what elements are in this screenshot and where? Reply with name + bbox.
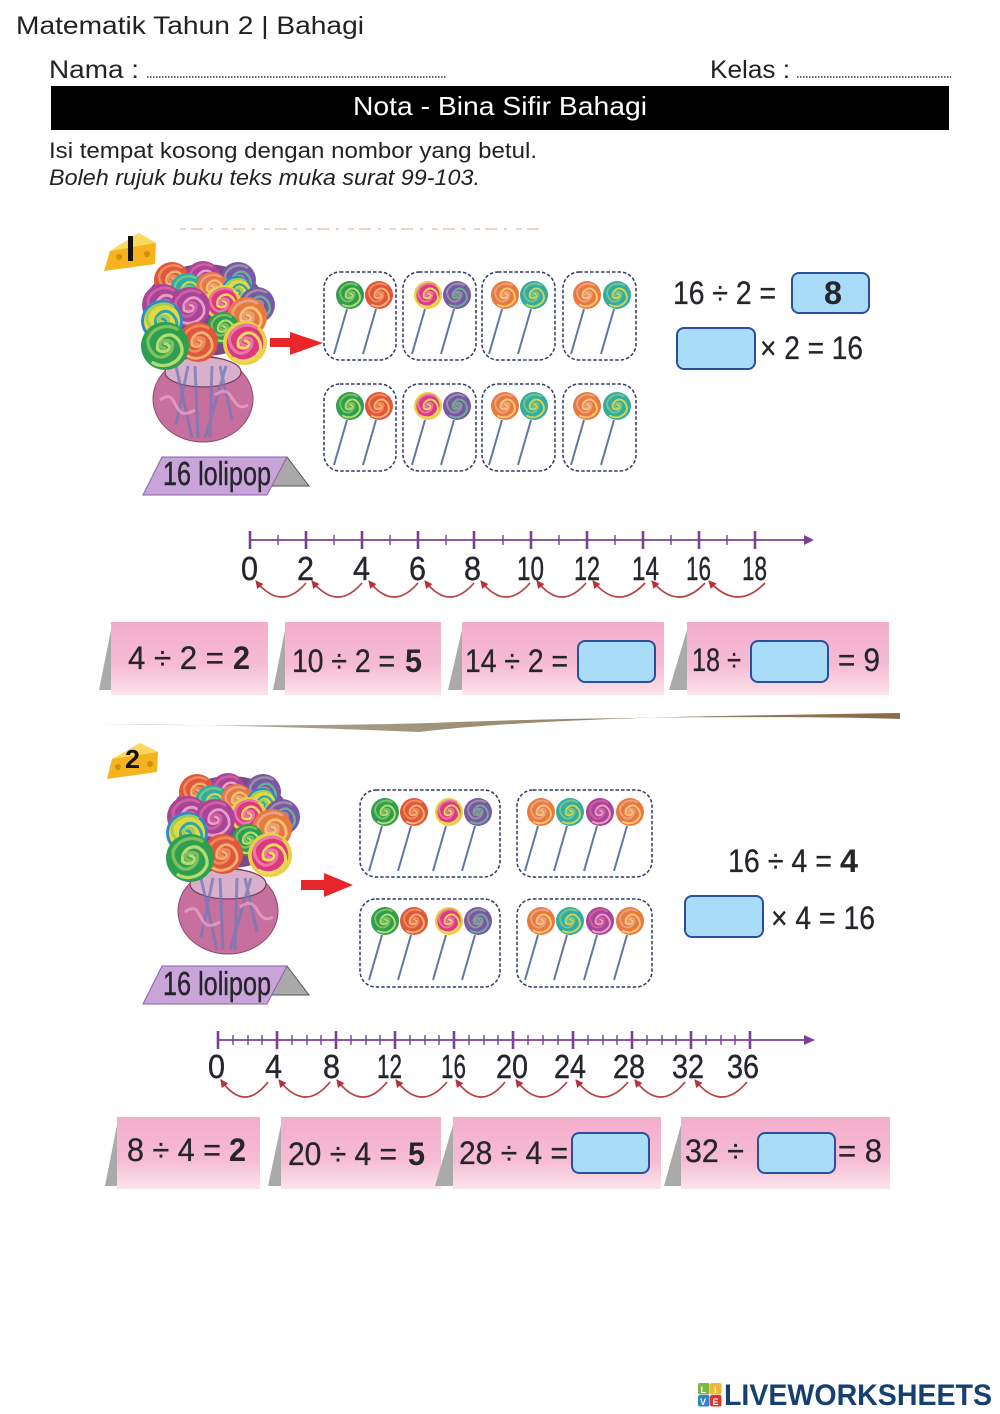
number line 0 to 36: 16: [441, 1048, 466, 1085]
card: 4 divided by 2: 4 ÷ 2 =: [128, 640, 224, 676]
section divider: [100, 713, 900, 732]
card: 28 divided by 4: 28 ÷ 4 =: [459, 1135, 568, 1171]
number line 0 to 18: 12: [574, 550, 600, 587]
footer logo: Liveworksheets: L: [700, 1385, 706, 1395]
number line 0 to 36: 24: [554, 1048, 586, 1085]
number line 0 to 18: 10: [517, 550, 544, 587]
card: 18 divided by blank: = 9: [838, 642, 880, 678]
card: 8 divided by 4: [105, 1117, 260, 1189]
heading bar: Nota - Bina Sifir Bahagi: [353, 91, 647, 121]
class field: Kelas :: [710, 56, 790, 84]
number line 0 to 36: 4: [265, 1048, 282, 1085]
number line 0 to 36: 20: [496, 1048, 528, 1085]
groups of 2 lollipops, bottom row: [324, 384, 636, 471]
number line 0 to 36: 36: [727, 1048, 759, 1085]
illustration: jar of 16 lollipops: [166, 773, 300, 954]
card: 14 divided by 2: 14 ÷ 2 =: [465, 643, 568, 679]
equation: 16 divided by 4: 4: [840, 843, 858, 879]
number line 0 to 18: 0: [241, 550, 258, 587]
card: 4 divided by 2: 2: [233, 640, 250, 676]
card: 8 divided by 4: 2: [229, 1132, 246, 1168]
card: 32 divided by blank: 32 ÷: [685, 1133, 744, 1169]
illustration: jar of 16 lollipops: [141, 261, 275, 442]
icon: cheese number 2: 2: [125, 744, 140, 774]
name field: Nama :: [49, 56, 139, 84]
footer logo: Liveworksheets: E: [712, 1397, 719, 1407]
label: 16 lolipop: 16 lolipop: [163, 965, 271, 1002]
number line 0 to 36: 8: [323, 1048, 340, 1085]
card: 18 divided by blank: [669, 622, 889, 695]
card: 10 divided by 2: 5: [405, 643, 422, 679]
equation: 16 divided by 2: [673, 273, 869, 313]
title: Matematik Tahun 2 | Bahagi: [16, 12, 364, 40]
card: 10 divided by 2: [273, 622, 441, 695]
number line 0 to 36: [208, 1031, 815, 1085]
number line 0 to 18: 4: [353, 550, 370, 587]
jump arrows back by 4: [221, 1080, 747, 1097]
card: 20 divided by 4: 5: [408, 1136, 425, 1172]
card: 4 divided by 2: [99, 622, 268, 695]
number line 0 to 18: 16: [686, 550, 711, 587]
number line 0 to 36: 0: [208, 1048, 225, 1085]
card: 10 divided by 2: 10 ÷ 2 =: [292, 643, 395, 679]
card: 32 divided by blank: = 8: [838, 1133, 882, 1169]
card: 18 divided by blank: 18 ÷: [692, 642, 741, 678]
footer logo: Liveworksheets: I: [714, 1385, 717, 1395]
number line 0 to 18: 8: [464, 550, 481, 587]
icon: cheese number 2: [107, 743, 158, 779]
arrow: [270, 332, 323, 355]
card: 20 divided by 4: [268, 1117, 441, 1189]
number line 0 to 18: 2: [297, 550, 314, 587]
groups of 4 lollipops, bottom row: [360, 899, 652, 987]
equation: 16 divided by 4: 16 ÷ 4 =: [728, 843, 832, 879]
equation: 16 divided by 2: 16 ÷ 2 =: [673, 275, 776, 311]
label: 16 lolipop: 16 lolipop: [163, 455, 271, 492]
instruction text: Boleh rujuk buku teks muka surat 99-103.: [49, 165, 480, 190]
equation: blank times 4: × 4 = 16: [771, 900, 875, 936]
instruction text: Isi tempat kosong dengan nombor yang betul.: [49, 138, 537, 163]
number line 0 to 36: 32: [672, 1048, 704, 1085]
equation: blank times 2: × 2 = 16: [760, 330, 863, 366]
equation: 16 divided by 2: 8: [824, 275, 842, 311]
footer logo: Liveworksheets: V: [700, 1397, 706, 1407]
arrow: [301, 873, 353, 897]
card: 20 divided by 4: 20 ÷ 4 =: [288, 1136, 397, 1172]
card: 8 divided by 4: 8 ÷ 4 =: [127, 1132, 221, 1168]
number line 0 to 36: 12: [377, 1048, 402, 1085]
card: 32 divided by blank: [664, 1117, 890, 1189]
number line 0 to 18: 18: [742, 550, 767, 587]
jump arrows back by 2: [256, 581, 765, 597]
number line 0 to 18: [241, 531, 814, 587]
section 2: [105, 743, 890, 1189]
equation: blank times 2: [677, 328, 863, 369]
instruction text: [49, 138, 537, 190]
groups of 2 lollipops, top row: [324, 272, 636, 360]
equation: blank times 4: [685, 896, 875, 937]
card: 14 divided by 2: [448, 622, 664, 695]
footer logo: Liveworksheets: LIVEWORKSHEETS: [724, 1379, 992, 1412]
groups of 4 lollipops, top row: [360, 790, 652, 877]
number line 0 to 36: 28: [613, 1048, 645, 1085]
number line 0 to 18: 6: [409, 550, 426, 587]
icon: cheese number 1: [104, 233, 156, 271]
card: 28 divided by 4: [435, 1117, 661, 1189]
number line 0 to 18: 14: [632, 550, 659, 587]
heading bar: [51, 86, 949, 130]
section 1: [99, 233, 889, 695]
